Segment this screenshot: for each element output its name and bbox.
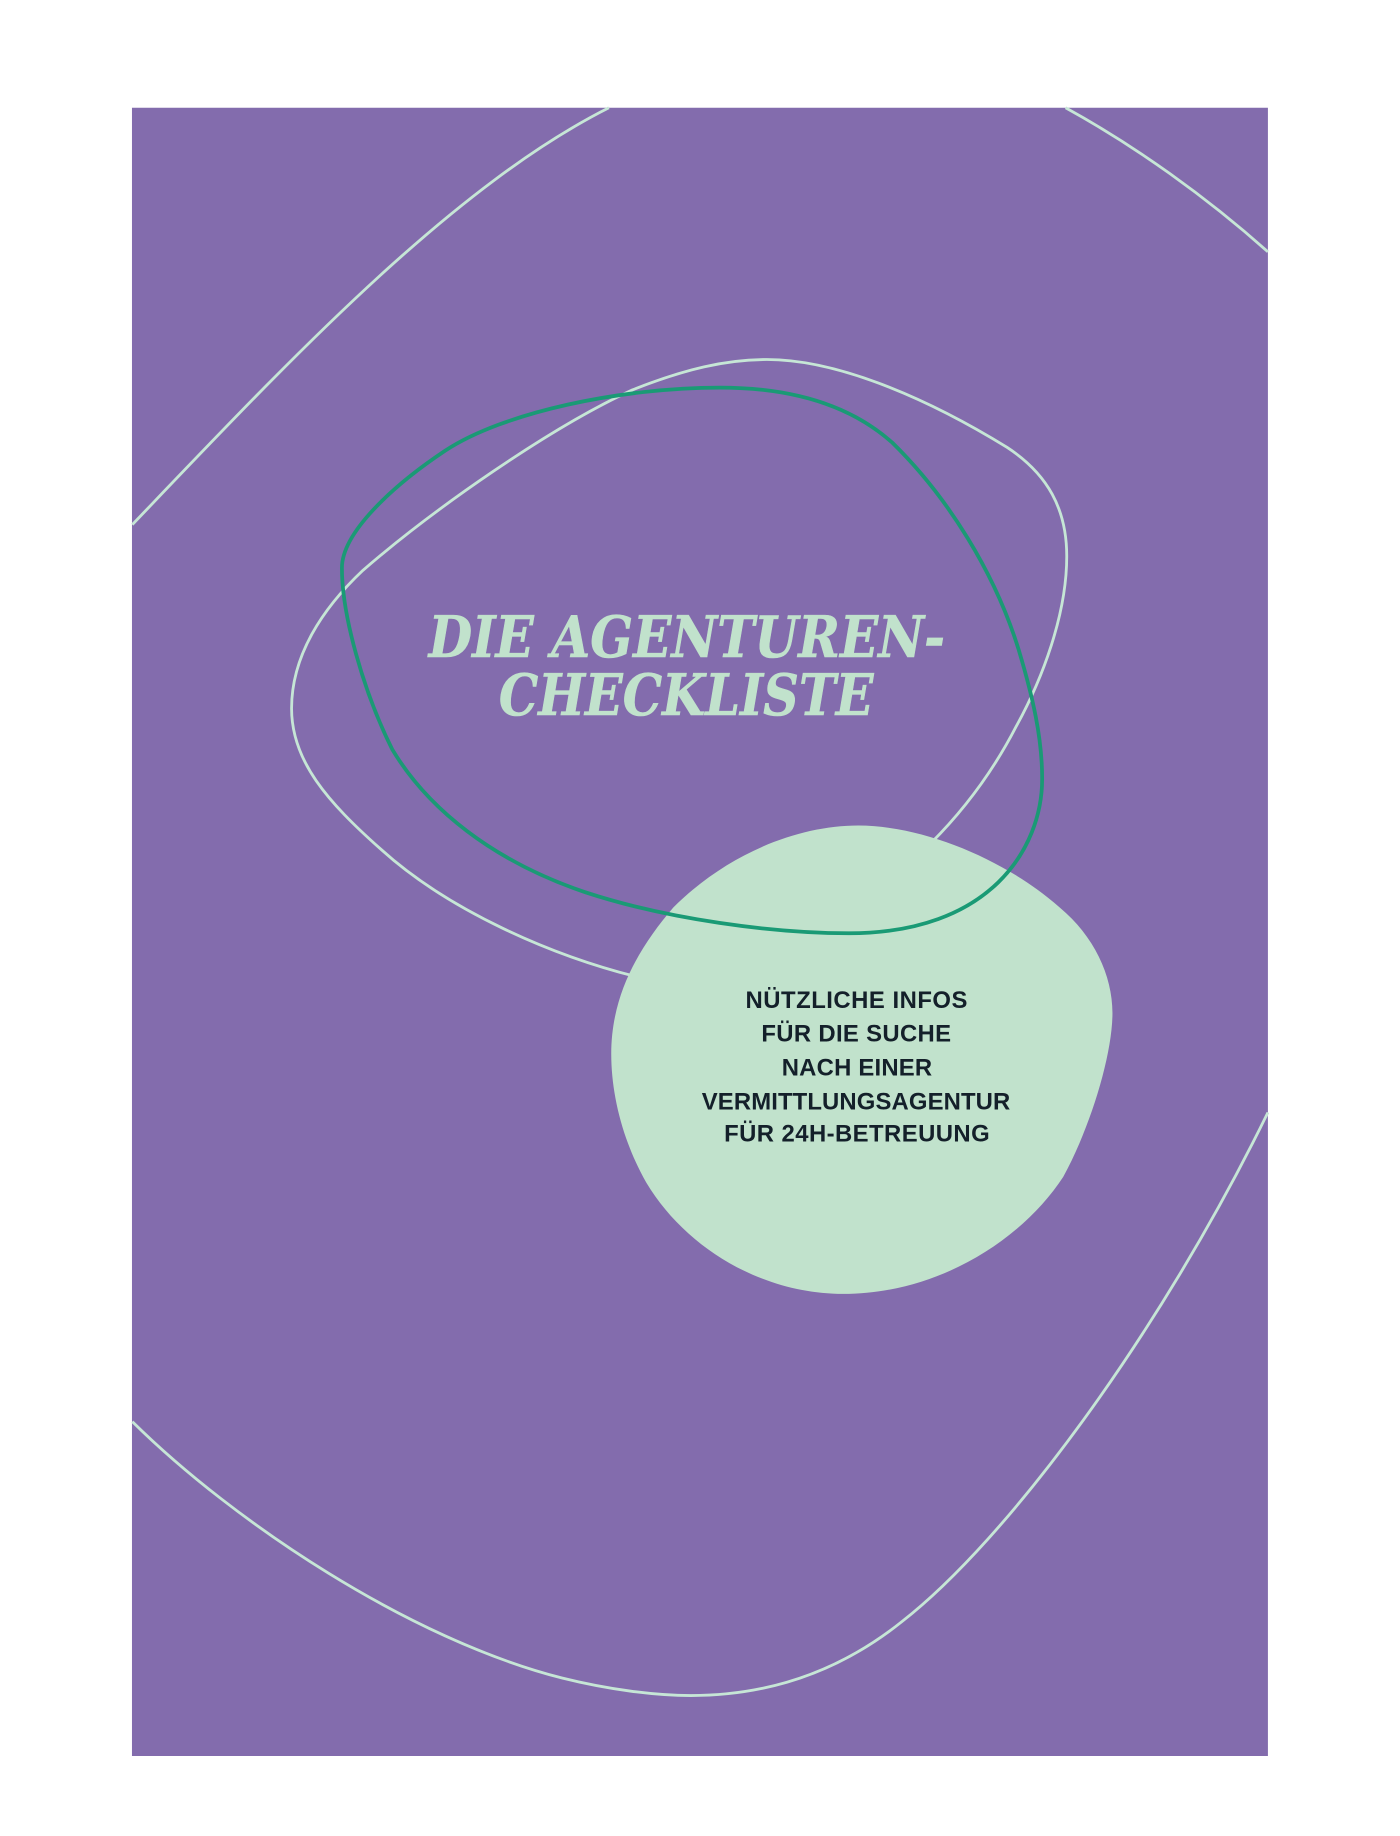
subtitle: VERMITTLUNGSAGENTUR	[702, 1089, 1010, 1116]
subtitle: NÜTZLICHE INFOS	[746, 987, 967, 1014]
subtitle: NACH EINER	[782, 1055, 932, 1082]
subtitle: FÜR 24H-BETREUUNG	[724, 1121, 990, 1148]
title	[427, 603, 945, 729]
title: DIE AGENTUREN-	[427, 603, 945, 671]
purple cover panel	[132, 108, 1268, 1756]
green contour blob	[342, 388, 1042, 933]
outer contour lines	[132, 108, 1268, 1696]
title: CHECKLISTE	[499, 661, 875, 729]
mint blob	[611, 826, 1112, 1294]
subtitle: FÜR DIE SUCHE	[761, 1021, 951, 1048]
subtitle	[702, 987, 1010, 1148]
light contour blob	[292, 360, 1067, 981]
